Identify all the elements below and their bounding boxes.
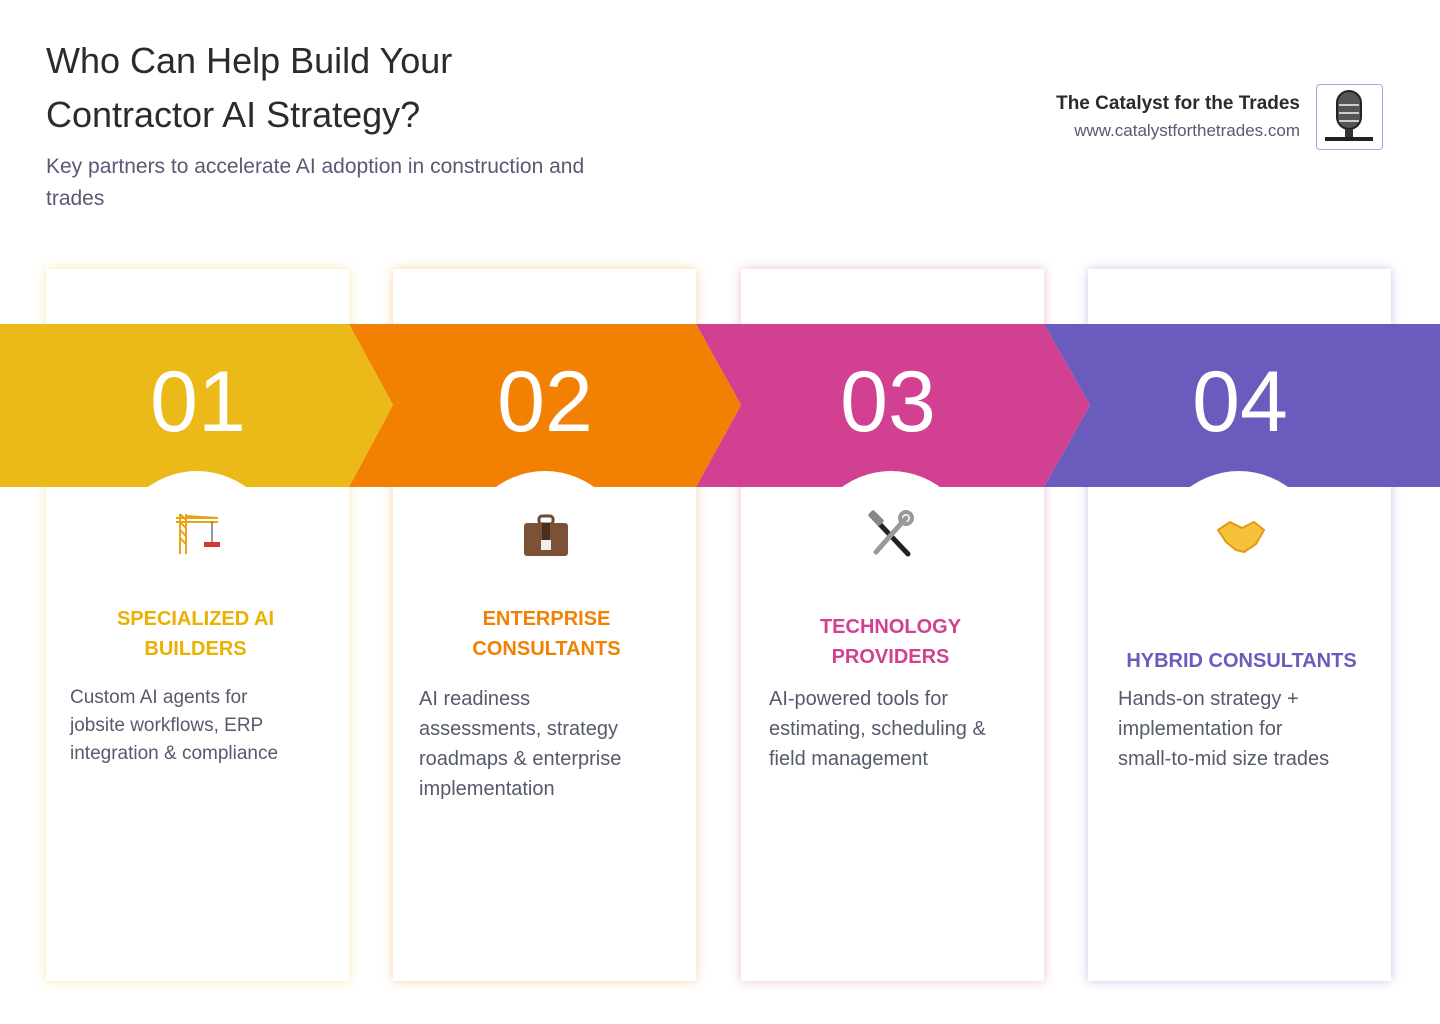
card 3: [741, 269, 1044, 981]
card 2: [393, 269, 696, 981]
logo: microphone: [1316, 84, 1383, 150]
brand name: The Catalyst for the Trades: [1056, 93, 1300, 114]
chevron band: [0, 324, 1440, 487]
title: Who Can Help Build Your: [46, 40, 452, 81]
text 4: small-to-mid size trades: [1118, 748, 1329, 770]
heading 1: [117, 608, 274, 660]
icon: crane: [176, 513, 220, 554]
text 4: implementation for: [1118, 718, 1283, 740]
number 01: 01: [150, 354, 246, 450]
brand url: www.catalystforthetrades.com: [1074, 121, 1300, 140]
text 1: Custom AI agents for jobsite workflows, ERP integration & compliance: [70, 687, 278, 764]
heading 2: CONSULTANTS: [472, 638, 621, 660]
heading 3: PROVIDERS: [832, 646, 949, 668]
number 03: 03: [840, 354, 936, 450]
title: [46, 40, 452, 135]
number 02: 02: [497, 354, 593, 450]
card 4: [1088, 269, 1391, 981]
heading 2: ENTERPRISE: [483, 608, 610, 630]
text 2: AI readiness assessments, strategy roadmaps & enterprise implementation: [419, 688, 621, 800]
heading 3: [820, 616, 961, 668]
heading 3: TECHNOLOGY: [820, 616, 961, 638]
card 1: [46, 269, 349, 981]
icon: hammer and wrench: [868, 510, 914, 556]
heading 1: BUILDERS: [144, 638, 247, 660]
text 3: AI-powered tools for estimating, scheduling & field management: [769, 688, 986, 770]
heading 4: HYBRID CONSULTANTS: [1126, 650, 1357, 672]
text 4: Hands-on strategy +: [1118, 688, 1299, 710]
icon: handshake: [1216, 520, 1266, 554]
text 4: [1118, 688, 1329, 770]
heading 1: SPECIALIZED AI: [117, 608, 274, 630]
icon: briefcase: [524, 514, 568, 556]
title: Contractor AI Strategy?: [46, 94, 420, 135]
subtitle: Key partners to accelerate AI adoption in construction and trades: [46, 155, 584, 210]
heading 2: [472, 608, 621, 660]
brand block: [1056, 84, 1383, 150]
number 04: 04: [1192, 354, 1288, 450]
